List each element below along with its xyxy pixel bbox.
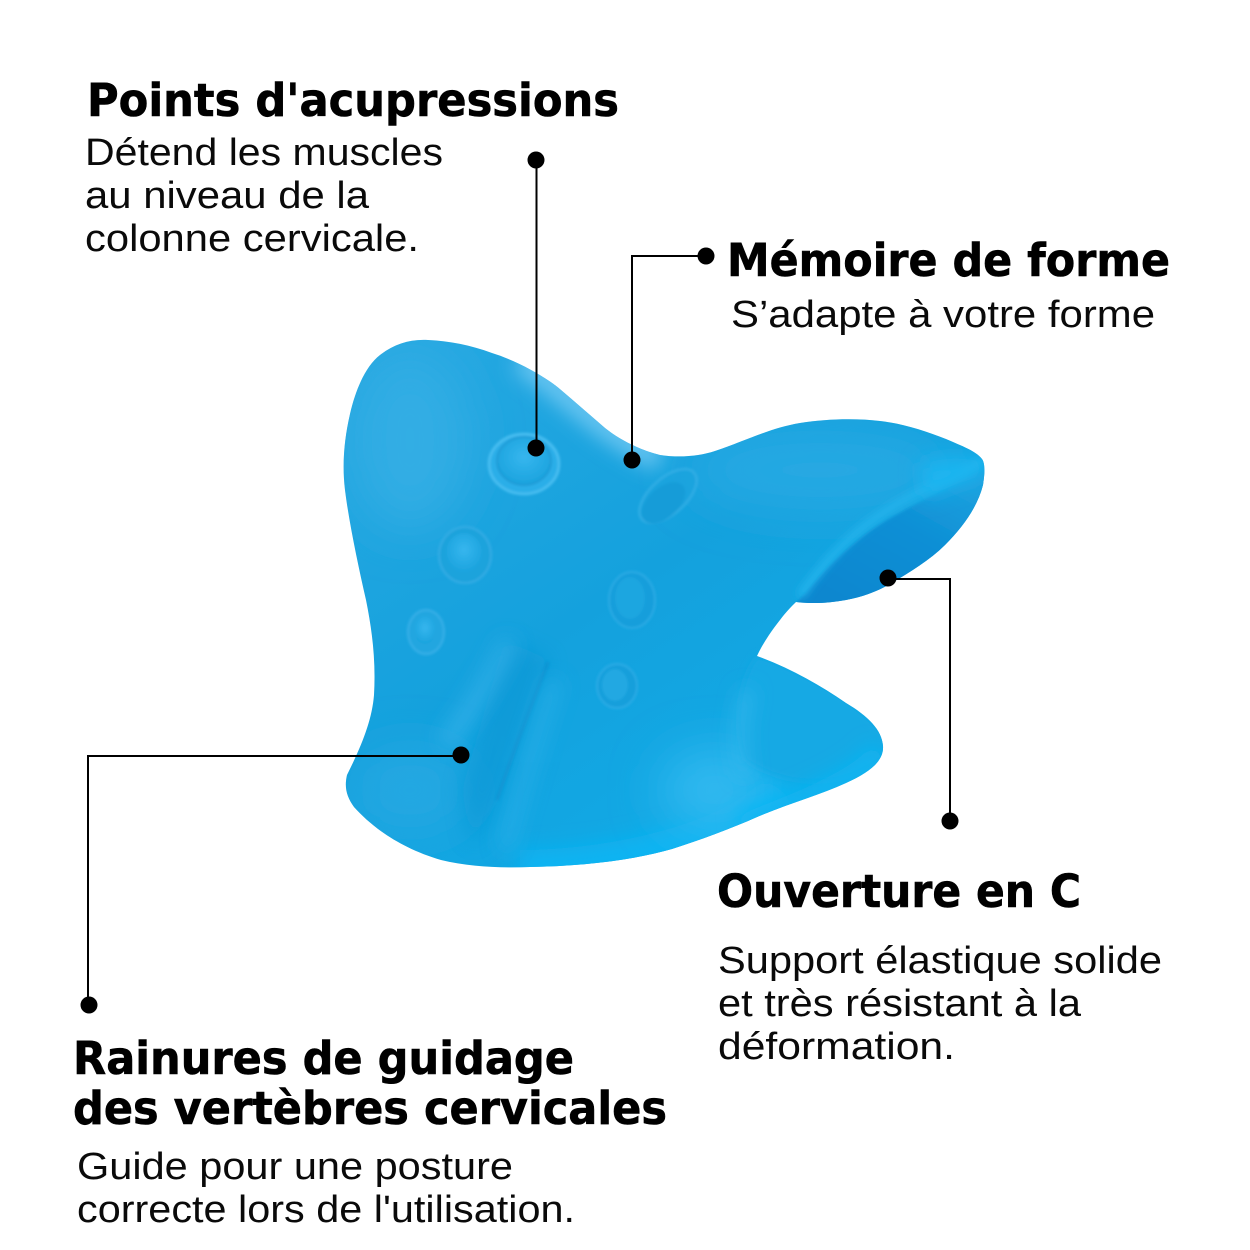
heading: acupressure points: Points d'acupressions bbox=[87, 74, 619, 127]
heading: C opening: Ouverture en C bbox=[717, 865, 1081, 918]
acupressure nodule 5 bbox=[609, 572, 655, 628]
text: acupressure description: au niveau de la bbox=[85, 175, 370, 217]
guide groove bbox=[462, 739, 502, 816]
heading: guide grooves bbox=[73, 1032, 667, 1135]
text: C opening description: déformation. bbox=[718, 1026, 955, 1068]
text: acupressure description: Détend les muscles bbox=[85, 132, 443, 174]
heading: guide grooves: des vertèbres cervicales bbox=[73, 1082, 667, 1135]
acupressure nodule 3 bbox=[439, 527, 491, 583]
connector: C opening bbox=[880, 570, 958, 830]
underside of the C opening bbox=[796, 466, 990, 610]
text: acupressure description bbox=[85, 132, 443, 260]
text: shape memory description: S’adapte à votre forme bbox=[731, 294, 1155, 336]
heading: guide grooves: Rainures de guidage bbox=[73, 1032, 574, 1085]
text: C opening description bbox=[718, 940, 1162, 1068]
text: C opening description: et très résistant à la bbox=[718, 983, 1082, 1025]
foot bbox=[757, 654, 884, 770]
acupressure nodule 1 bbox=[489, 434, 559, 494]
text: guide grooves description bbox=[77, 1146, 575, 1231]
heading: shape memory: Mémoire de forme bbox=[727, 234, 1170, 287]
product illustration: blue neck pillow bbox=[330, 330, 1000, 880]
text: guide grooves description: correcte lors de l'utilisation. bbox=[77, 1189, 575, 1231]
acupressure nodule 6 bbox=[597, 664, 637, 708]
text: acupressure description: colonne cervicale. bbox=[85, 218, 419, 260]
connector: shape memory bbox=[624, 248, 714, 468]
text: C opening description: Support élastique solide bbox=[718, 940, 1162, 982]
text: guide grooves description: Guide pour une posture bbox=[77, 1146, 513, 1188]
acupressure nodule 2 bbox=[630, 459, 706, 533]
rim highlight bbox=[800, 460, 984, 596]
connector: acupressure points bbox=[528, 152, 544, 456]
connector: guide grooves bbox=[80, 746, 470, 1014]
acupressure nodule 4 bbox=[408, 610, 444, 654]
